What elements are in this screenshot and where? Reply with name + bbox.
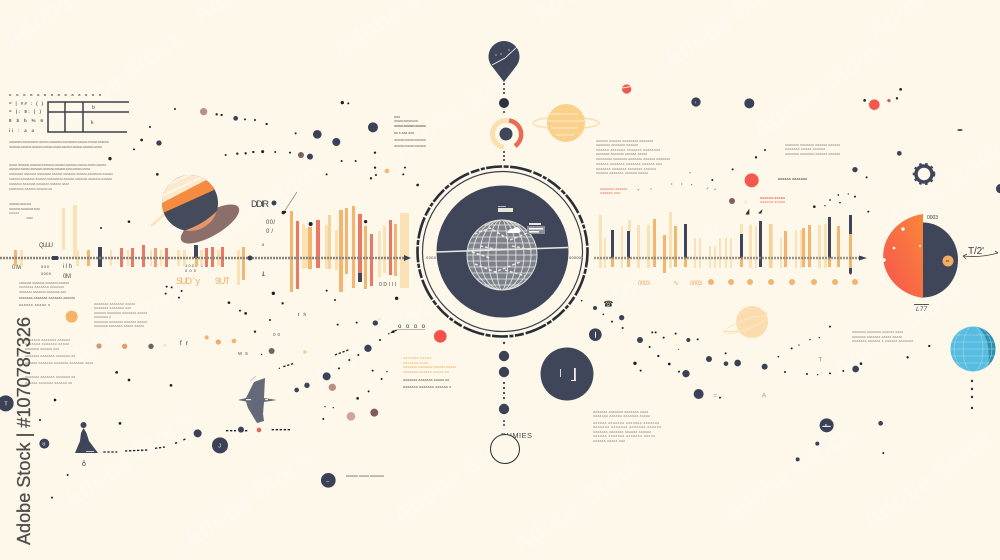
text block: left upper paragraphs: aaaaaa aaaaaaaa aaaaaa aaaaaaaaa aaaaaa aaaaaaa aaaaaaa aaaaaa xyxy=(9,177,112,181)
saturn: top xyxy=(533,104,599,142)
vertical dots: under blue globe xyxy=(971,380,973,409)
text block: lower-left 2: aaaaaaa aaaaaaa aaa xyxy=(94,306,131,310)
text block: lower-left 2 xyxy=(94,302,147,328)
text block: orange lines: aaaaaaa aaaaaaa aaaaaa a xyxy=(403,385,451,389)
arrow label: T/2' xyxy=(963,246,998,259)
scattered dots: lower left xyxy=(0,286,447,499)
text block: left upper paragraphs: aaaaa xyxy=(9,211,19,215)
orange axis labels xyxy=(176,276,230,286)
scattered dots: lower left: ʊ xyxy=(42,441,45,447)
table: top-left grid: b xyxy=(92,105,95,111)
small glyph labels: left axis: 1 xyxy=(262,272,266,278)
saturn: pale lower xyxy=(723,306,768,338)
bar chart: left xyxy=(14,205,409,292)
text block: right upper 1 xyxy=(596,139,670,175)
orange bars left xyxy=(14,206,397,292)
text block: orange lines: aaaaaaa aaaaaaa aaaaa aa xyxy=(403,378,449,382)
text block: red notes: aaaaaa aaa xyxy=(600,191,620,195)
center-left glyph labels: 00 xyxy=(273,332,280,337)
text block: left upper paragraphs: aaaaaaa aaaaaaa aaaaaaa aaaaaa aaaa xyxy=(9,182,69,186)
watermark pattern: Adobe Stock xyxy=(387,54,529,165)
table: top-left grid: k xyxy=(91,120,94,126)
icon: woman figure xyxy=(75,422,98,453)
text block: lower right xyxy=(852,330,913,343)
small glyph labels: left axis xyxy=(12,220,396,288)
text block: bottom center: aaaaaaa aaaaaaa aaaaaaa aaaa xyxy=(593,410,648,414)
small glyph labels: left axis: 0/ xyxy=(266,229,273,235)
orange dot row xyxy=(638,279,858,287)
text block: center top: aaaaaa aaaaaaa aaaaaaa xyxy=(394,124,426,128)
text block: bottom center: aaaaaaa aaaaaaa aaaaaaa aaaaaa xyxy=(593,425,661,429)
label: DDIR: DDIR xyxy=(251,199,270,209)
orange axis labels: 'y xyxy=(193,276,200,286)
horizon line xyxy=(436,248,568,252)
text block: center top: aaaaaaa aaaaaaa aaa xyxy=(394,119,418,123)
text block: right upper 2: aaaaaaa aaaaaaa aaaaaa aaaaaa xyxy=(785,152,840,156)
text block: right upper 1: aaaaaaa aaaaaaa aaaaaaa aaaaaa xyxy=(596,167,656,171)
cloud xyxy=(507,227,521,233)
small glyph labels: left axis: 8 xyxy=(262,272,265,277)
small glyph labels: left axis: 0M' xyxy=(12,265,23,271)
small figure under woman: ô xyxy=(82,461,86,468)
text block: left upper paragraphs: aaaaaaaa aaaaaaa aaaaaaaa aaaaaa aaaaaaa aaaaaa aaaaaaaa aaaaaa xyxy=(9,172,113,176)
small glyph labels: left axis: 0000 0 xyxy=(185,263,204,268)
orange bars right xyxy=(611,219,852,273)
half-disc chart: L77 xyxy=(916,307,928,313)
text block: bottom center: aaaaaaa aaaaaaa aaaaaa aaaaaa xyxy=(593,430,651,434)
text block: lower right: aaaaaaa aaaaaaa aaaaaa aaaa xyxy=(852,330,903,334)
scattered dots: upper right xyxy=(622,84,1000,215)
text block: lower-left 3 xyxy=(25,338,93,385)
gear icon xyxy=(914,164,934,184)
small glyph labels: left axis: 00/ xyxy=(266,220,275,226)
text block: red notes: aaaaaa aaaaa xyxy=(760,200,785,204)
text block: red notes xyxy=(600,187,785,204)
text block: orange lines: aaaaaaa aaaaa xyxy=(403,356,431,360)
arrow label: T/2': T/2' xyxy=(968,246,984,257)
text block: lower-left 1: aaaaaaa aaaaaaa aaaaaaa aaa xyxy=(19,290,66,294)
text block: orange lines: aaaaaaa aaaa xyxy=(403,361,428,365)
watermark pattern: Adobe Stock xyxy=(177,444,319,555)
orange axis labels: SUD xyxy=(176,276,192,286)
text block: left upper paragraphs: aaaa xyxy=(26,216,33,220)
dark bars left xyxy=(98,245,362,282)
center-left glyph labels xyxy=(180,312,381,356)
text block: center top: aaaaaaa aaaaaaa aaaaaaaa xyxy=(394,138,426,142)
text block: lower right: aaaaaaa aaaaaa a aaaaaa aaaaaaa xyxy=(852,339,913,343)
text block: center top: aaa xyxy=(394,115,400,119)
watermark pattern: Adobe Stock xyxy=(387,419,529,530)
watermark pattern: Adobe Stock xyxy=(507,449,649,560)
text block: right upper 2: aaaaaa aaaaaaa xyxy=(778,177,807,181)
text block: top-left labels: = |: 8: | ) xyxy=(9,109,42,114)
vertical dots: top xyxy=(499,83,509,161)
text block: lower-left 2: aaaaaaa aaaaaaa aaaaaa aaaaa xyxy=(94,320,147,324)
small glyph labels: left axis: QUUU xyxy=(39,243,53,249)
text block: left upper paragraphs: aaaaaaaa aaaaaaaaaa aaaaaa aaaaaaaa aaaaaaaaa aaaaaa aaaaaa aaaaaaa xyxy=(9,140,109,144)
center-left glyph labels: th xyxy=(298,312,306,317)
small glyph labels: left axis: 0DIII xyxy=(379,282,396,288)
watermark pattern: Adobe Stock xyxy=(747,34,889,145)
watermark pattern: Adobe Stock xyxy=(857,424,999,535)
small glyph labels: left axis: 0M xyxy=(63,274,71,280)
text block: bottom center: aaaaaa aaaaaaa aaaaaaa aaaaaaa xyxy=(593,421,659,425)
watermark pattern: Adobe Stock xyxy=(587,214,729,325)
text block: lower right: aaaaaaa aaaaaaa aaaaa aaaaa xyxy=(852,335,902,339)
vertical dots: bottom xyxy=(499,342,509,426)
text block: top-left labels: = | ## : ( ) xyxy=(9,101,44,106)
text block: right upper 2: aaaaaaa aaaaaaa aaaaaa aaaaaa xyxy=(785,143,840,147)
blue globe xyxy=(950,326,996,372)
top label xyxy=(498,206,513,212)
scattered dots: lower right: = xyxy=(713,392,717,399)
text block: right upper 2 xyxy=(778,143,840,181)
scattered dots: lower right: A xyxy=(762,392,767,399)
small glyph labels: left axis: 0000 xyxy=(41,271,52,276)
scattered dots: lower right: T xyxy=(818,357,822,364)
text block: right upper 1: aaaaaaa aaaaaaa aaaaaa xyxy=(596,143,638,147)
side labels xyxy=(426,255,582,260)
pale bars right xyxy=(599,212,827,268)
watermark pattern: Adobe Stock xyxy=(57,404,199,515)
pale bars left xyxy=(20,205,409,288)
text block: lower-left 3: aaaaaaa aaaaaaa aaaaaaa aa xyxy=(25,354,75,358)
watermark pattern: Adobe Stock xyxy=(187,154,329,265)
ring gauge xyxy=(490,118,522,150)
small glyph labels: left axis: 000 xyxy=(185,268,197,273)
text block: right upper 2: aaaaaaa aaaaa aaaaaa xyxy=(785,147,825,151)
side watermark text: Adobe Stock | #1070787326 xyxy=(14,317,34,545)
label: DDIR xyxy=(251,192,297,213)
text block: top-left labels: o o o a a a a a a a a a a a xyxy=(9,92,102,97)
red bars left xyxy=(120,214,392,289)
orange axis labels: 9UT xyxy=(215,276,230,286)
label: dashed callout: o o o o xyxy=(398,324,426,330)
axis: left xyxy=(0,255,411,261)
text block: bottom center: aaaaaaa aaaaaa aaaaaaa aaaaa xyxy=(593,414,650,418)
scattered dots: upper left xyxy=(100,101,419,229)
text block: lower-left 3: aaaaaa aaaaaaa aaaaaa aa xyxy=(25,381,72,385)
text block: top-left labels: 8 $ h % 6 xyxy=(9,118,43,123)
text block: lower-left 1: aaaaaaa aaaaaaa aaaaaaa aaaaaa xyxy=(19,296,75,300)
text block: left upper paragraphs: aaaaaaa aaaa aaa xyxy=(9,202,31,206)
small glyph labels: left axis: 000 xyxy=(41,264,50,269)
globe xyxy=(467,220,537,290)
scattered dots: lower left: T xyxy=(4,401,8,407)
center-left glyph labels: WS xyxy=(238,351,248,356)
text block: right upper 1: aaaaaa aaaaaaa aaaaaa aaaaa xyxy=(596,171,648,175)
pin xyxy=(488,41,520,82)
watermark pattern: Adobe Stock xyxy=(717,419,859,530)
bar chart: right xyxy=(599,212,852,275)
text block: right upper 1: aaaaaaaa aaaaaaa aaaaaaa aaaaaa aaaaaaa xyxy=(596,157,670,161)
half-disc chart xyxy=(882,214,958,313)
scattered dots: lower right: ☎ xyxy=(603,300,613,309)
text block: lower-left 3: aaaaaa aaaaaaa aaaaaaa aaaaaaa aaaa xyxy=(25,361,93,365)
scattered dots: lower left: – xyxy=(326,478,329,484)
axis: right xyxy=(594,256,867,260)
text block: orange lines xyxy=(403,356,456,389)
text block: right upper 1: aaaaaa aaaaaaa aaaaaaa aaaaaaaa xyxy=(596,148,660,152)
big dark circle xyxy=(540,348,594,400)
scattered dots: lower right xyxy=(581,300,930,461)
text block: orange lines: aaaaaaa aaaaaaa aaaaaa aaaaa xyxy=(403,365,456,369)
text block: left upper paragraphs: aaaaaaa aaaaaaaa aaaa xyxy=(9,207,40,211)
text block: left upper paragraphs: aaaaaaaa aaaaaa aaaaaa aa xyxy=(9,187,52,191)
text block: lower-left 3: aaaaaaa aaaaaaa aaaaaaa aa xyxy=(25,375,75,379)
small glyph labels: left axis: 8 xyxy=(262,242,265,247)
text block: lower-left 2: aaaaaaa a xyxy=(94,315,111,319)
text block: red notes: aaaaaaa aaaaaa xyxy=(600,187,627,191)
side labels: 0000 xyxy=(426,255,437,260)
text block: lower-left 1 xyxy=(19,281,75,307)
watermark pattern: Adobe Stock xyxy=(827,274,969,385)
text block: left upper paragraphs: aaaaaaa aaaaaaa aaaaaaa aaaaaa aaaaa aaaaaaa aaaaaa aaaaaaa aaaaa xyxy=(9,145,102,149)
text block: lower-left 3: aaaaaaa aaaaaaa aaaaa xyxy=(25,342,69,346)
table: top-left grid xyxy=(48,102,129,132)
label box xyxy=(527,223,545,234)
open circle xyxy=(490,434,520,464)
text block: left upper paragraphs: aaaaaaa aaaaaa aaaaaaaa aaaaaaa aaaaaaa aaaa aaaaaa aaaaa xyxy=(9,167,90,171)
center-left glyph labels: fr xyxy=(180,341,188,347)
text block: lower-left 2: aaaaaa aaaaaaa aaaaaaa aaaaa xyxy=(94,311,147,315)
text block: right upper 1: aaaaaa aaaaaa aaaaaaaa aaaaaaa xyxy=(596,139,653,143)
text block: top-left labels xyxy=(9,92,102,133)
text block: center top: aaaaaaa aaaaaaa aaaaaaaa xyxy=(394,144,426,148)
text block: orange lines: aaaaaaa aaaaaa aaaaa aa xyxy=(403,370,449,374)
text block: right upper 1: aaaaaa aaaaaaa aaaaaaa aaaaaa aaa xyxy=(596,162,662,166)
text block: lower-left 3: aaaaaaa aaaaaa aaa xyxy=(25,347,59,351)
text block: top-left labels: ii : a a xyxy=(9,128,34,133)
text block: lower-left 2: aaaaaaa aaaaaaa aaaaa aaaaa xyxy=(94,324,144,328)
text block: right upper 1: aaaaaaa aaaaaaa aaaaaa aaaaa xyxy=(596,152,647,156)
label: BUMES: BUMIES xyxy=(501,431,532,440)
scattered dots: upper right: i xyxy=(695,101,696,105)
center-left glyph labels: ⌂ xyxy=(378,316,381,321)
dark bars right xyxy=(611,215,852,275)
text block: lower-left 1: aaaaaa aaaaa a xyxy=(19,303,50,307)
text block: lower-left 1: aaaaaaa aaaaaaa aaaaaaa aaaaaa xyxy=(19,281,69,285)
watermark pattern: Adobe Stock xyxy=(47,24,189,135)
text block: bottom center: aaaaaa aaaaa aaa xyxy=(593,439,625,443)
small glyph labels: left axis: ilh xyxy=(63,264,72,270)
icon: manta shape xyxy=(238,376,277,423)
central dial xyxy=(418,166,588,336)
text block: center top: aa a aaa aaa xyxy=(394,131,414,135)
text block: left upper paragraphs xyxy=(9,140,113,220)
text block: bottom center: aaaaaa aaaaaaa aaaaaaa aaaaa xyxy=(593,434,655,438)
text block: center top xyxy=(394,115,426,148)
text block: bottom center xyxy=(593,410,661,443)
text block: red notes: aaaaaa aaaaa xyxy=(760,196,785,200)
text block: lower-left 2: aaaaaaa aaaaaaa aaaaa xyxy=(94,302,135,306)
orange dot row: 0003 xyxy=(638,281,651,287)
scattered dots: lower left: J xyxy=(218,443,221,449)
planet: striped with ring and disc xyxy=(150,175,240,244)
text block: left upper paragraphs: aaaaa aaaaaaa aaaaaaa aaaaaaaa aaaaaa aaaaaaa aaaaaa aaaaa aaaaaa xyxy=(9,163,106,167)
orange dot row: 0003 xyxy=(690,281,703,287)
watermark pattern: Adobe Stock xyxy=(307,284,449,395)
text block: lower-left 3: aaaaaaa aaaaaaa aaaaaa xyxy=(25,338,70,342)
orange dot row: ∿ xyxy=(673,280,679,287)
text block: lower-left 1: aaaaaaa aaaaaaa aaaaaaa xyxy=(19,285,64,289)
text block: bottom caption: aaaaaa aaaaa aaaaaaa xyxy=(346,474,384,478)
side labels: 00000 xyxy=(569,255,582,260)
half-disc chart: 0003 xyxy=(927,215,938,221)
watermark pattern: Adobe Stock xyxy=(47,274,189,385)
